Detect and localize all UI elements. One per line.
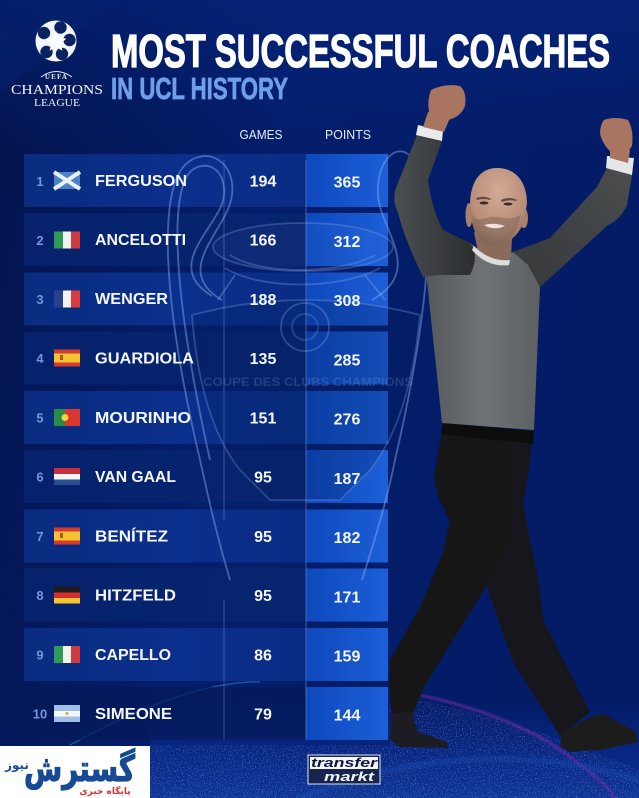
ranks: 7 [36, 529, 44, 544]
flag: Spain [54, 528, 80, 544]
neck [474, 232, 512, 264]
column header: games: GAMES [240, 128, 282, 142]
coach names: FERGUSON [95, 173, 187, 190]
logo: UEFA Champions League [11, 20, 103, 109]
trophy watermark [168, 151, 428, 740]
markt word: markt [324, 769, 375, 784]
games values: 194 [250, 174, 276, 190]
raised left arm [394, 135, 475, 277]
left wrist [423, 112, 450, 132]
beard stubble [472, 214, 521, 246]
games values: 95 [254, 470, 272, 486]
flag: Scotland [54, 172, 80, 189]
ranks: 6 [36, 470, 44, 484]
row 2 background [24, 213, 388, 266]
row 3 background [24, 272, 388, 326]
coach names: ANCELOTTI [95, 232, 186, 249]
League wordmark: LEAGUE [34, 98, 80, 109]
points values: 182 [334, 530, 360, 547]
games values: 95 [254, 529, 272, 546]
belt [441, 423, 534, 444]
games values: 135 [250, 351, 276, 368]
games values: 79 [254, 706, 272, 724]
coach names: CAPELLO [95, 647, 171, 664]
points values: 171 [334, 590, 360, 606]
ears [466, 203, 528, 228]
points values: 187 [334, 471, 360, 488]
flags [54, 172, 80, 722]
flag: Netherlands [54, 468, 80, 485]
points values: 276 [334, 412, 360, 428]
coach names: HITZFELD [95, 588, 176, 604]
row 7 background [24, 510, 388, 562]
flag: Argentina [54, 705, 80, 722]
flag: Germany [54, 586, 80, 604]
left shoe [390, 712, 448, 748]
ranks: 3 [36, 292, 44, 307]
ranks: 9 [36, 648, 44, 662]
UEFA wordmark: UEFA [45, 73, 68, 81]
right wrist [610, 148, 630, 163]
ranks: 1 [36, 174, 44, 189]
points values [334, 174, 360, 724]
games values [250, 174, 276, 724]
transfer word: transfer [311, 755, 378, 770]
row 1 background [24, 154, 388, 207]
Champions wordmark: CHAMPIONS [11, 82, 103, 97]
points values: 159 [334, 648, 360, 666]
row 6 background [24, 450, 388, 503]
coach names: MOURINHO [95, 410, 191, 427]
head [470, 168, 527, 246]
column header: points: POINTS [325, 128, 371, 142]
Persian suffix: نیوز [4, 758, 29, 773]
left trouser leg [389, 425, 510, 716]
ranks [33, 174, 47, 722]
ranks: 10 [33, 706, 47, 722]
games values: 86 [254, 648, 272, 664]
coach figure: Guardiola celebrating [389, 85, 638, 752]
points values: 285 [334, 352, 360, 370]
subtitle: IN UCL HISTORY [111, 71, 288, 106]
row 10 background [24, 687, 388, 740]
coach names: GUARDIOLA [95, 350, 194, 368]
row 9 background [24, 628, 388, 681]
ranks: 2 [36, 233, 44, 248]
icon: starball [36, 20, 76, 62]
right trouser leg [488, 431, 590, 736]
logo: Transfermarkt [308, 755, 380, 784]
coach names [95, 173, 194, 723]
left cuff [416, 125, 443, 141]
right shoe [560, 714, 638, 752]
games values: 166 [250, 232, 276, 250]
ranks: 8 [36, 588, 44, 603]
left fist [428, 85, 465, 120]
eyebrows, eyes and mouth [476, 197, 517, 228]
sweater torso [425, 243, 542, 430]
collar [472, 246, 510, 265]
row 8 background [24, 568, 388, 622]
raised right arm [513, 168, 632, 287]
games values: 95 [254, 588, 272, 605]
points values: 365 [334, 174, 360, 192]
row 5 background [24, 391, 388, 444]
panel: coach ranking table [24, 154, 388, 740]
points values: 308 [334, 293, 360, 310]
points values: 312 [334, 234, 360, 251]
Persian tagline: پایگاه خبری [79, 785, 131, 797]
right fist [600, 118, 632, 154]
coach names: BENÍTEZ [95, 526, 168, 546]
ranks: 5 [36, 410, 44, 426]
coach names: VAN GAAL [95, 469, 176, 486]
flag: Portugal [54, 409, 80, 426]
games values: 188 [250, 292, 276, 309]
row 4 background [24, 332, 388, 384]
games values: 151 [250, 410, 276, 428]
trophy inscription: COUPE DES CLUBS CHAMPIONS [203, 375, 413, 389]
flag: Spain [54, 350, 80, 366]
flag: Italy [54, 646, 80, 663]
points values: 144 [334, 708, 360, 724]
ranks: 4 [36, 351, 44, 366]
coach names: WENGER [95, 291, 168, 308]
coach names: SIMEONE [95, 706, 172, 723]
Persian wordmark: گسترش [24, 748, 135, 790]
logo: Gostaresh News watermark [0, 746, 150, 798]
right cuff [606, 156, 634, 175]
flag: France [54, 290, 80, 308]
flag: Italy [54, 232, 80, 248]
